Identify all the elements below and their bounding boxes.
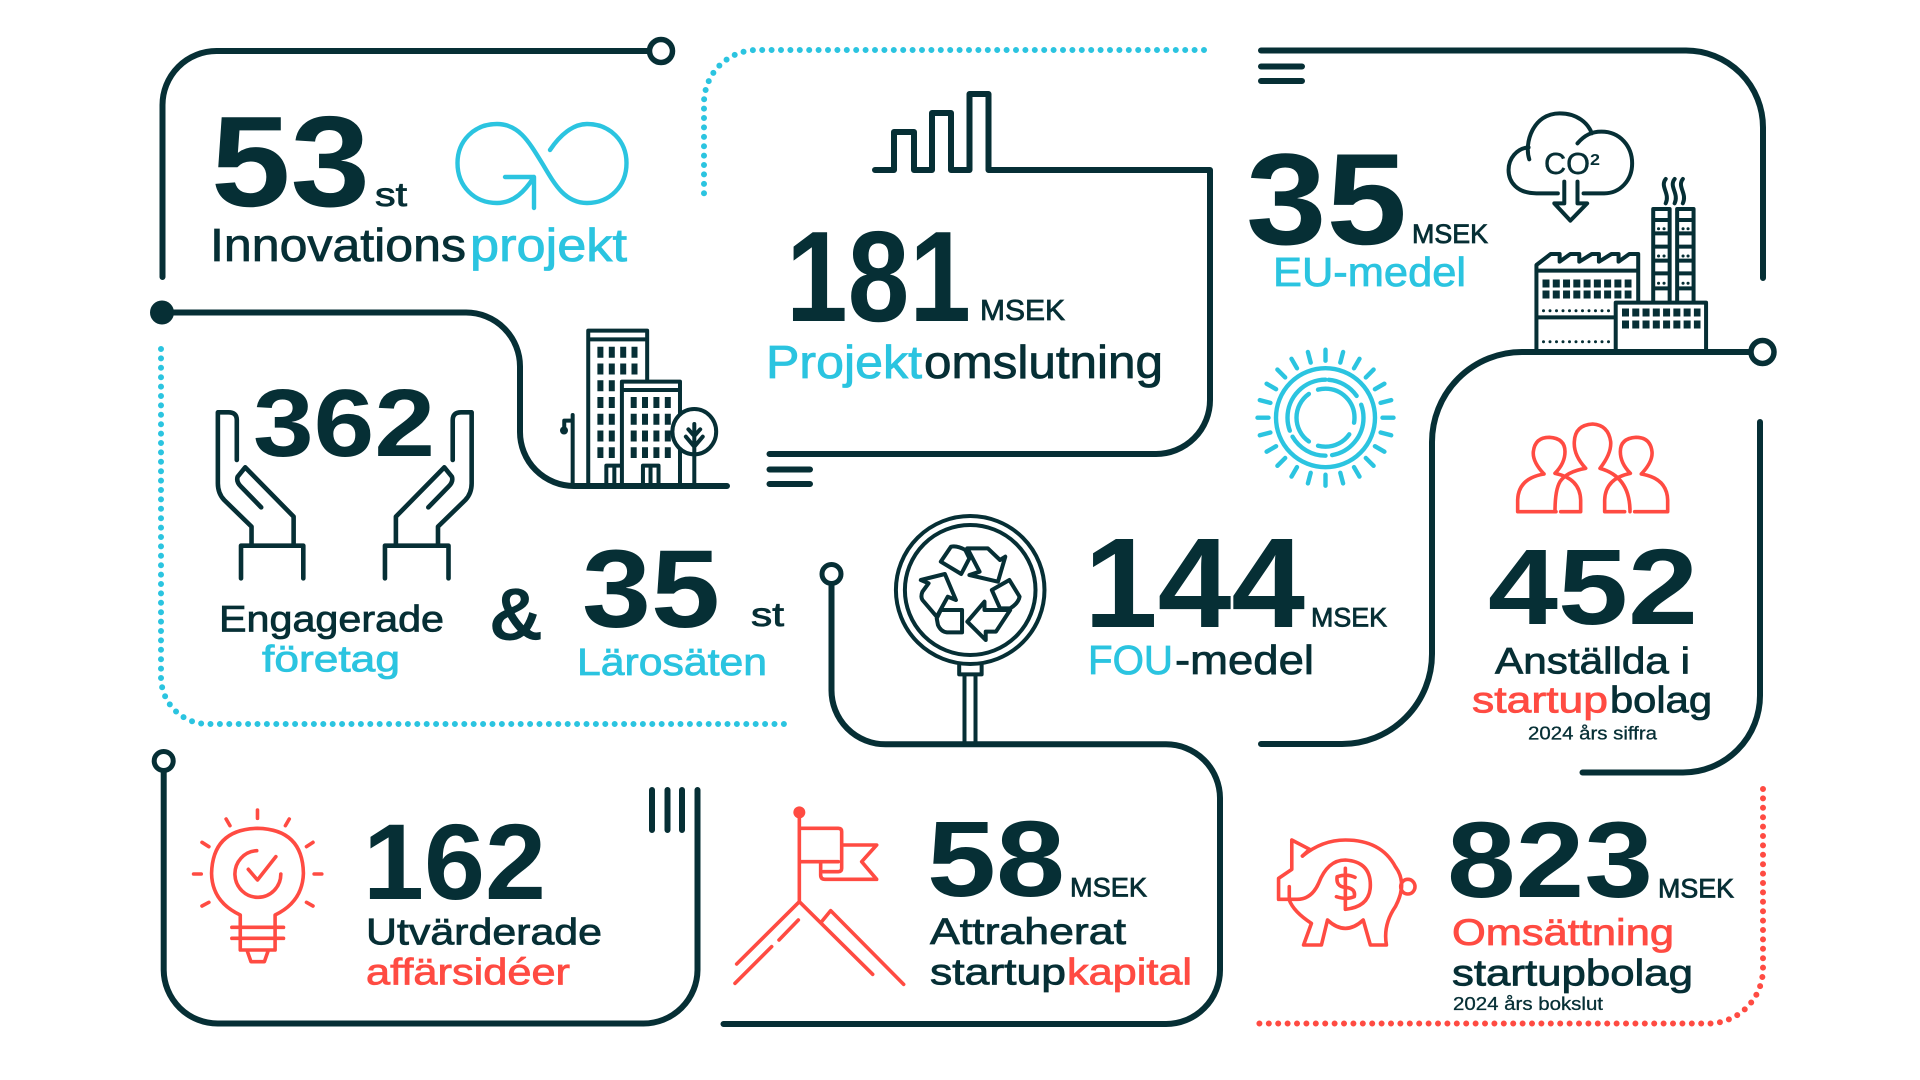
panel: utvärderade affärsidéer [154,752,697,1024]
label: EU-medel: EU-medel [1273,249,1466,295]
frame with start ring [724,564,1220,1024]
label: Utvärderade affärsidéer: Utvärderade [366,912,602,952]
label: Anställda i startupbolag: bolag [1610,680,1712,720]
number 162: 162 [363,801,546,922]
label: Utvärderade affärsidéer [366,912,602,992]
icon: CO2 cloud with arrow: CO [1544,146,1590,181]
left frame with ring [1261,340,1774,744]
note: 2024 års bokslut: 2024 års bokslut [1453,994,1603,1014]
icon: CO2 cloud with arrow [1509,113,1632,221]
label: Attraherat startupkapital: startup [930,952,1066,992]
unit st: st [375,176,407,213]
label: Attraherat startupkapital: kapital [1067,952,1192,992]
icon: open hands [218,412,472,578]
panel: anställda i startupbolag [1261,340,1774,772]
panel: innovationsprojekt [162,40,672,277]
panel: engagerade företag och lärosäten [150,300,786,724]
label: Anställda i startupbolag: Anställda i [1495,640,1690,682]
icon: factory [1536,179,1706,350]
icon: infinity arrow [458,124,626,208]
label: Anställda i startupbolag [1472,640,1712,720]
number 144: 144 [1084,512,1305,655]
right frame [1582,422,1760,772]
frame with start ring [154,752,697,1024]
panel: projektomslutning [704,50,1210,484]
panel: FOU-medel [724,512,1387,1024]
number 53: 53 [211,90,370,234]
label: Projektomslutning: omslutning [924,336,1163,388]
frame with end ring [162,40,672,277]
unit MSEK: MSEK [1311,602,1387,632]
label: Attraherat startupkapital: Attraherat [930,911,1127,952]
label: Lärosäten: Lärosäten [577,642,767,684]
icon: buildings [560,331,716,485]
note: 2024 års siffra: 2024 års siffra [1528,724,1658,744]
small dash lines [1261,66,1302,81]
label: Engagerade företag: Engagerade [219,598,444,640]
label: Projektomslutning: Projekt [766,336,922,388]
icon: CO2 cloud with arrow: 2 [1590,152,1600,169]
unit st: st [751,596,784,633]
icon: light bulb with check [194,810,322,962]
number 35: 35 [582,528,720,651]
dotted blue corner line [704,50,1204,195]
dotted blue corner line [161,349,786,724]
panel: EU-medel [1246,50,1763,350]
label: Omsättning startupbolag [1452,912,1693,994]
unit MSEK: MSEK [1658,874,1734,904]
label: Omsättning startupbolag: Omsättning [1452,912,1674,953]
icon: recycling sign [896,516,1044,744]
number 35: 35 [1246,126,1407,272]
label: Anställda i startupbolag: startup [1472,680,1608,720]
number 362: 362 [253,370,435,477]
unit MSEK: MSEK [980,295,1066,327]
label: Attraherat startupkapital [930,911,1192,992]
number 823: 823 [1447,799,1653,920]
label: Engagerade företag: företag [262,638,400,680]
number 452: 452 [1488,526,1698,647]
panel: attraherat startupkapital [735,798,1192,992]
label: Projektomslutning [766,336,1163,388]
number 58: 58 [927,798,1065,919]
frame with start dot [150,300,727,486]
frame [1261,50,1763,278]
label: Utvärderade affärsidéer: affärsidéer [366,952,570,992]
unit MSEK: MSEK [1070,872,1147,902]
frame with bar chart skyline [770,94,1210,454]
label: Engagerade företag [219,598,444,680]
number 181: 181 [786,205,971,349]
label: Innovationsprojekt: Innovations [210,219,466,271]
icon: flag on mountain [735,806,904,984]
label: Omsättning startupbolag: startupbolag [1452,952,1693,994]
small vertical dash lines [652,790,682,830]
label: Innovationsprojekt [210,219,627,271]
panel: omsättning startupbolag [1258,789,1763,1024]
icon: three people [1518,424,1668,512]
label: Innovationsprojekt: projekt [470,219,627,271]
icon: piggy bank [1279,840,1415,945]
label: FOU-medel [1088,637,1314,683]
small dash lines [770,470,810,484]
label: FOU-medel: FOU [1088,637,1173,683]
dotted red corner line [1258,789,1763,1024]
label: FOU-medel: -medel [1175,637,1314,683]
icon: sun [1258,350,1394,486]
ampersand: & [489,573,543,656]
unit MSEK: MSEK [1412,219,1488,249]
